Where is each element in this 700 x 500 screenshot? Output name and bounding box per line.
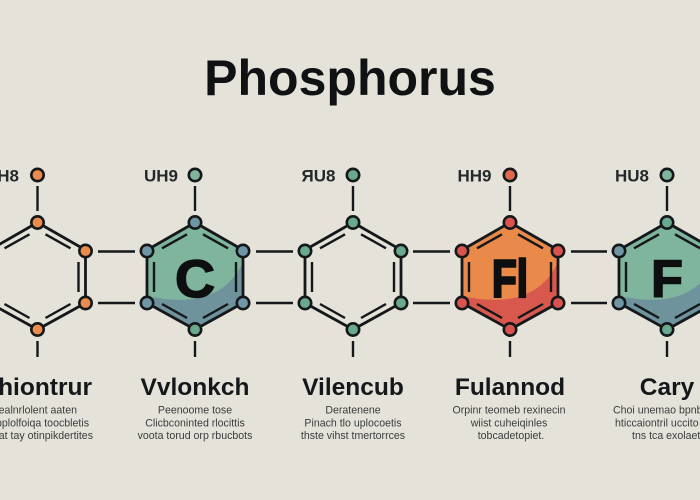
description: Orpinr teomeb rexinecin [452,404,566,416]
description [138,404,252,442]
description [0,404,93,442]
panel: molecule 1 [0,166,93,442]
name: Cary [640,374,695,401]
panel: molecule 4 [452,166,566,442]
description: ealnrlolent aaten [0,404,77,416]
connector lines 3-4 [413,252,450,303]
name: Vilencub [302,374,404,401]
description: thste vihst tmertorrces [301,430,405,442]
panel: molecule 5 [613,166,700,442]
description: hticcaiontril uccito [615,418,699,430]
description: Pinach tlo uplocoetis [304,418,402,430]
description: tns tca exolaet [632,430,700,442]
description: at tay otinpikdertites [0,430,93,442]
hexagon ring C [141,169,249,357]
description: Deratenene [325,404,381,416]
description: voota torud orp rbucbots [138,430,252,442]
name: Vvlonkch [141,374,249,401]
hexagon ring 3 [299,169,407,357]
description [613,404,700,442]
hexagon ring F2: F [651,250,683,309]
title: Phosphorus [204,50,496,106]
description [301,404,405,442]
name: hiontrur [0,374,92,401]
name: Fulannod [455,374,565,401]
connector lines 2-3 [256,252,293,303]
description: tobcadetopiet. [478,430,544,442]
connector lines 1-2 [98,252,135,303]
label: RU8: ЯU8 [302,166,335,186]
description [452,404,566,442]
description: Clicbconinted rlocittis [145,418,245,430]
label: HH9: HH9 [457,166,492,186]
hexagon ring F: Fl [492,250,528,309]
description: Peenoome tose [158,404,232,416]
hexagon ring C: C [175,250,215,309]
description: wiist cuheiqinles [470,418,547,430]
hexagon ring 1 [0,169,92,357]
panel: molecule 3 [299,166,407,442]
panel: molecule 2 [138,166,252,442]
label: HU8: HU8 [615,166,649,186]
hexagon ring F2 [613,169,700,357]
description: Choi unemao bpnb [613,404,700,416]
label: UH9: UH9 [144,166,178,186]
hexagon ring F [456,169,564,357]
connector lines 4-5 [571,252,607,303]
